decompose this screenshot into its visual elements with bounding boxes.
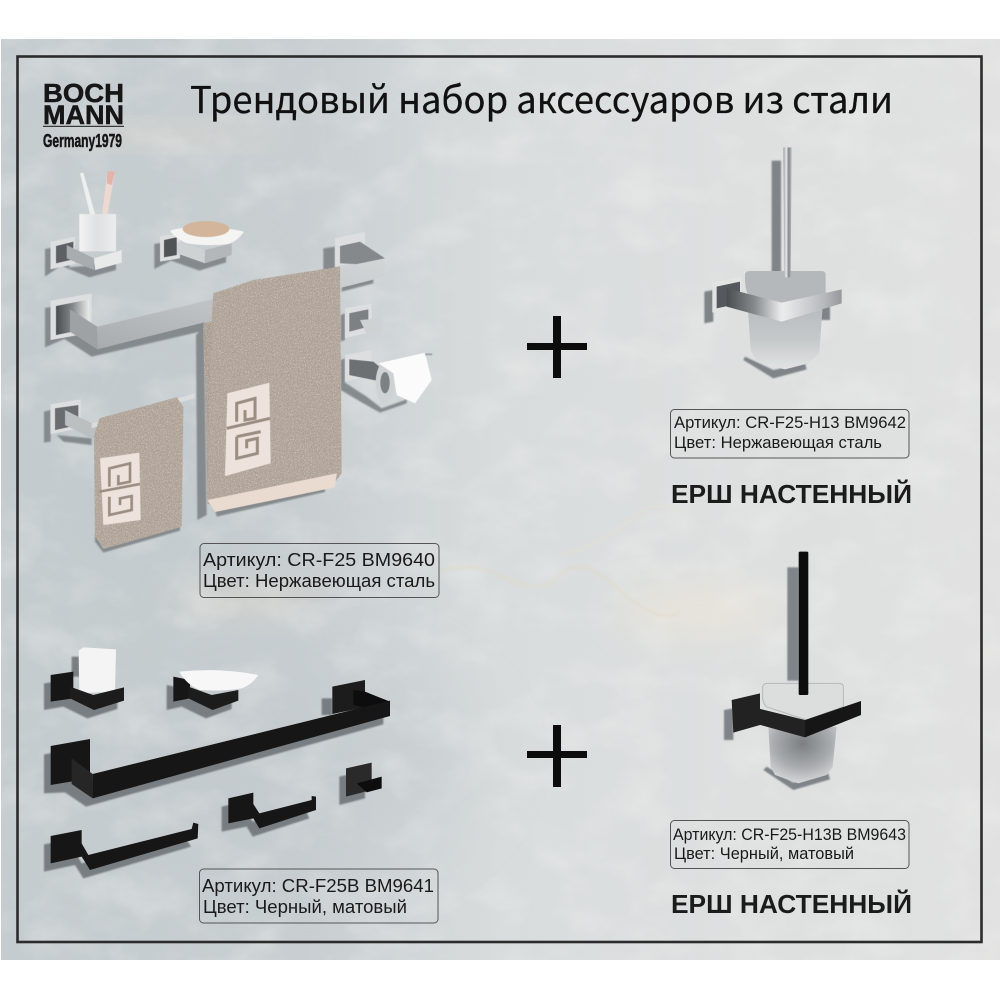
icon: large towel — [203, 267, 342, 512]
icon: frosted glass holder — [745, 271, 826, 369]
label: CR-F25B BM9641: Артикул: CR-F25B BM9641 — [202, 875, 434, 896]
logo: Bochmann: MANN — [43, 100, 124, 130]
label: CR-F25-H13B BM9643: Цвет: Черный, матовый — [674, 844, 854, 863]
icon: frosted glass black holder — [763, 683, 843, 783]
icon: steel soap dish — [160, 221, 244, 263]
shadows of black set — [44, 657, 383, 878]
title: Трендовый набор аксессуаров из стали — [190, 70, 893, 124]
shadow of black brush — [724, 567, 830, 790]
label: CR-F25-H13 BM9642 — [670, 410, 909, 458]
heading: wall brush top: ЕРШ НАСТЕННЫЙ — [671, 479, 912, 509]
logo: Bochmann — [43, 78, 124, 151]
product: stainless wall brush holder — [704, 147, 842, 378]
label: CR-F25-H13 BM9642: Цвет: Нержавеющая сталь — [674, 433, 882, 452]
icon: steel hook — [345, 303, 381, 338]
icon: small towel — [94, 397, 183, 548]
icon: black towel ring bar — [51, 823, 198, 870]
icon: black brush handle — [799, 552, 808, 695]
label: CR-F25-H13B BM9643: Артикул: CR-F25-H13B BM9643 — [673, 825, 906, 844]
label: CR-F25 BM9640: Цвет: Нержавеющая сталь — [203, 570, 435, 591]
icon: toothbrushes — [80, 172, 115, 217]
icon: small steel towel bar — [51, 393, 195, 438]
label: CR-F25-H13B BM9643 — [670, 820, 909, 868]
icon: black tumbler holder — [51, 647, 124, 710]
icon: steel wall bracket — [712, 277, 842, 322]
icon: steel brush handle — [783, 147, 792, 277]
label: CR-F25 BM9640: Артикул: CR-F25 BM9640 — [203, 549, 435, 570]
shadow of brush — [704, 161, 830, 378]
label: CR-F25B BM9641 — [200, 869, 438, 923]
label: CR-F25B BM9641: Цвет: Черный, матовый — [203, 896, 407, 917]
plus sign bottom — [527, 725, 587, 787]
plus sign top — [527, 316, 587, 378]
shadows of steel set — [44, 241, 407, 553]
label: CR-F25 BM9640 — [200, 544, 439, 598]
icon: black hook — [346, 763, 382, 797]
icon: black wall bracket — [732, 693, 861, 737]
product set: matte black accessories — [44, 647, 390, 878]
logo: Bochmann: BOCH — [43, 78, 124, 108]
logo: Bochmann: Germany1979 — [43, 131, 122, 151]
product: black wall brush holder — [724, 552, 861, 790]
heading: wall brush bottom: ЕРШ НАСТЕННЫЙ — [671, 889, 912, 919]
icon: black soap dish — [173, 670, 258, 710]
icon: black paper holder — [228, 793, 316, 828]
icon: black towel bar — [51, 680, 390, 798]
label: CR-F25-H13 BM9642: Артикул: CR-F25-H13 BM9642 — [674, 413, 906, 432]
icon: steel tumbler holder — [51, 214, 122, 270]
icon: steel towel bar — [51, 232, 385, 349]
icon: steel paper holder — [345, 350, 432, 403]
product set: stainless steel accessories — [44, 172, 432, 553]
